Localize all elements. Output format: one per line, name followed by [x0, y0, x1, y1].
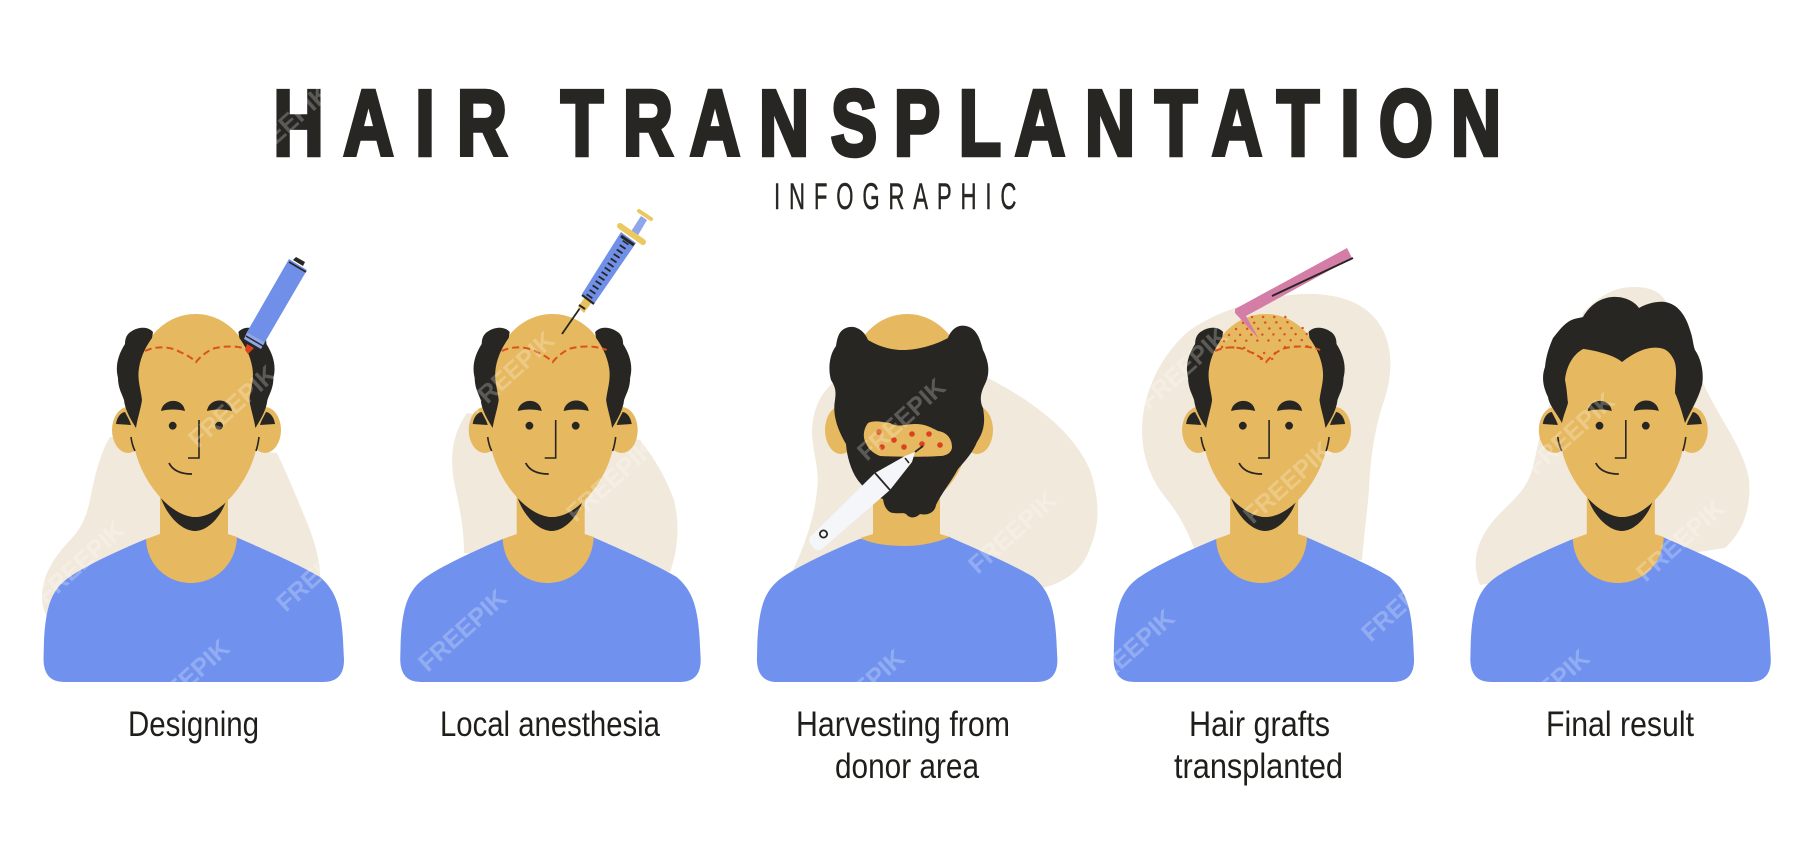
watermarks: FREEPIK: [1356, 554, 1455, 647]
watermarks: FREEPIK: [413, 584, 512, 677]
watermarks: FREEPIK: [852, 373, 951, 466]
background blob: [1476, 287, 1749, 585]
figure: [44, 314, 344, 682]
watermarks: FREEPIK: [561, 434, 660, 527]
watermarks: [44, 88, 1707, 682]
hair: [1543, 297, 1703, 423]
watermarks: FREEPIK: [271, 524, 370, 617]
background blob: [452, 413, 677, 572]
watermarks: FREEPIK: [1238, 436, 1337, 529]
step labels: [128, 705, 1694, 786]
label: harvesting from donor area: Harvesting from: [796, 705, 1010, 744]
background blob: [42, 437, 320, 618]
icon: punch tool: [809, 446, 923, 550]
label: harvesting from donor area: donor area: [835, 747, 979, 786]
title: HAIR TRANSPLANTATION: [274, 72, 1501, 175]
watermarks: FREEPIK: [136, 634, 235, 727]
watermarks: FREEPIK: [1134, 322, 1233, 415]
label: designing: Designing: [128, 705, 259, 744]
watermarks: FREEPIK: [1631, 494, 1730, 587]
label: harvesting from donor area: [796, 705, 1010, 786]
watermarks: FREEPIK: [1081, 604, 1180, 697]
watermarks: FREEPIK: [963, 486, 1062, 579]
watermarks: FREEPIK: [236, 79, 335, 172]
figure: back of head: [757, 314, 1057, 682]
label: local anesthesia: Local anesthesia: [440, 705, 660, 744]
panel: hair grafts transplanted: [1114, 248, 1414, 682]
hair: [829, 326, 988, 517]
figure: [400, 314, 701, 682]
panel: harvesting from donor area: [757, 314, 1098, 682]
watermarks: FREEPIK: [811, 644, 910, 737]
panel: designing: [42, 257, 344, 682]
label: hair grafts transplanted: transplanted: [1174, 747, 1343, 786]
watermarks: FREEPIK: [183, 360, 282, 453]
watermarks: FREEPIK: [1496, 644, 1595, 737]
icon: syringe: [562, 211, 651, 334]
background blob: [1142, 294, 1390, 560]
donor patch: [864, 421, 952, 457]
subtitle: INFOGRAPHIC: [774, 176, 1016, 217]
figure: [1114, 314, 1414, 682]
watermarks: FREEPIK: [31, 516, 130, 609]
icon: marker pen: [244, 257, 307, 354]
label: hair grafts transplanted: Hair grafts: [1189, 705, 1330, 744]
label: hair grafts transplanted: [1174, 705, 1343, 786]
panel: local anesthesia: [400, 211, 701, 682]
red donor dots: [876, 429, 943, 450]
label: final result: Final result: [1546, 705, 1694, 744]
figure: [1470, 314, 1771, 682]
panel: final result: [1470, 287, 1771, 682]
background blob: [793, 378, 1098, 588]
watermarks: FREEPIK: [461, 326, 560, 419]
graft dots: [1222, 317, 1313, 359]
icon: tweezers: [1235, 248, 1353, 339]
watermarks: FREEPIK: [1521, 387, 1620, 480]
